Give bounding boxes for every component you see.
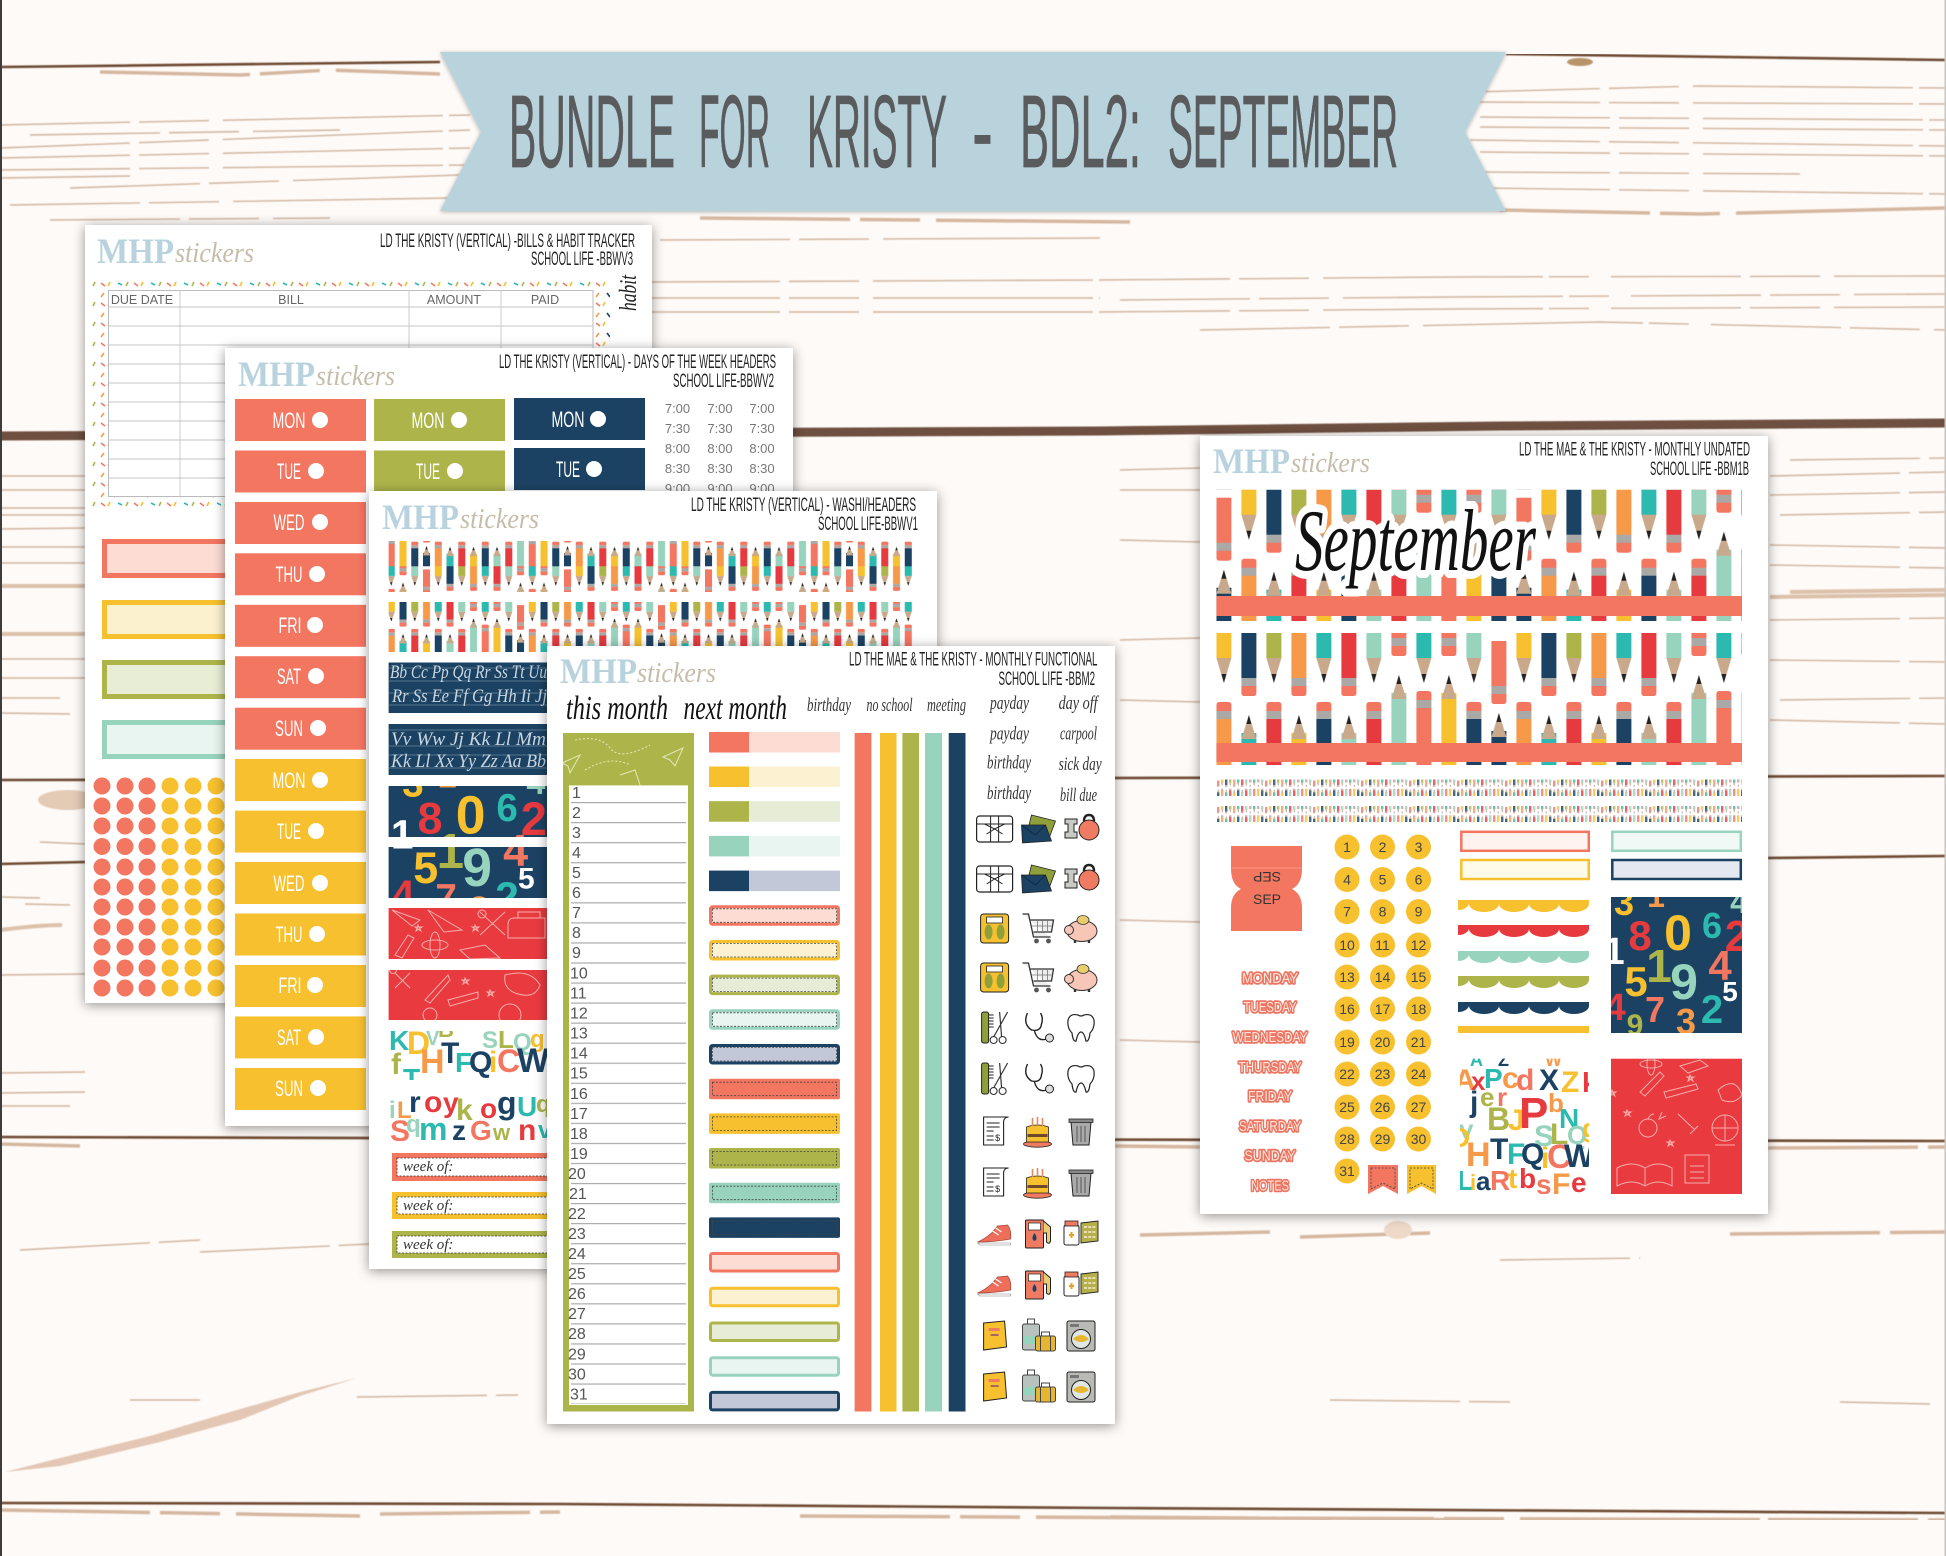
date circles: 12	[1411, 937, 1426, 953]
numbered list panel: 5	[572, 865, 581, 882]
script headings: this month	[566, 690, 668, 727]
date circles: 24	[1411, 1066, 1426, 1082]
alphabet pattern block: g	[1582, 1113, 1598, 1143]
label boxes	[104, 542, 234, 756]
icons: planner, luggage, washer	[984, 1319, 1095, 1402]
date circles: 1	[1343, 839, 1351, 855]
red school doodle block	[1609, 1053, 1742, 1194]
numbered list panel: 4	[572, 845, 581, 862]
outlined bars	[710, 1254, 838, 1410]
day tiles: coral and yellow column: WED	[274, 871, 304, 896]
alphabet pattern block: a	[1476, 1166, 1491, 1196]
day tiles: coral and yellow column: MON	[272, 768, 306, 793]
weekday stickers	[1232, 970, 1308, 1194]
sheet header	[691, 495, 918, 535]
date circles: 9	[1415, 904, 1423, 920]
alphabet pattern strips: g	[530, 1026, 545, 1053]
sheet header: SCHOOL LIFE-BBWV1	[818, 514, 918, 535]
alphabet pattern strips: m	[419, 1111, 447, 1147]
date circles: 17	[1375, 1001, 1390, 1017]
sheet header: LD THE KRISTY (VERTICAL) - DAYS OF THE WEEK HEADERS	[499, 352, 776, 373]
alphabet pattern block: L	[1550, 1118, 1568, 1151]
label boxes	[1461, 832, 1741, 879]
alphabet pattern block: B	[1487, 1101, 1510, 1137]
numbered list panel: 2	[572, 805, 581, 822]
icons: shoe, gas pump, pills	[978, 1220, 1098, 1299]
numbered list panel: 31	[570, 1386, 588, 1404]
scallop washi strips	[1458, 900, 1589, 1033]
alphabet pattern strips: k	[456, 1094, 473, 1127]
alphabet pattern block: J	[1508, 1104, 1525, 1137]
day tiles: coral and yellow column: FRI	[278, 613, 302, 638]
icons: scale, cart, piggy bank	[981, 914, 1097, 992]
alphabet pattern strips: S	[390, 1115, 410, 1148]
sheet header: SCHOOL LIFE -BBWV3	[531, 249, 633, 270]
time labels: 8:00	[707, 441, 733, 456]
date circles: 6	[1415, 872, 1423, 888]
pencil header strip two	[1216, 633, 1742, 765]
sheet header	[1519, 440, 1750, 480]
numbered list panel: 24	[568, 1246, 586, 1263]
numbered list panel: 6	[572, 885, 581, 902]
weekday stickers: THURSDAY	[1238, 1059, 1302, 1076]
week of labels	[394, 1156, 564, 1256]
alphabet pattern strips: U	[517, 1091, 537, 1122]
sheet header: LD THE KRISTY (VERTICAL) -BILLS & HABIT TRACKER	[380, 231, 635, 252]
date circles: 11	[1375, 937, 1390, 953]
banner title text: FOR	[699, 74, 770, 189]
numbered list panel: 9	[572, 945, 581, 962]
alphabet pattern strips: n	[518, 1114, 536, 1147]
date circles: 27	[1411, 1099, 1426, 1115]
alphabet pattern block: s	[1536, 1169, 1552, 1200]
alphabet pattern block: L	[1457, 1165, 1474, 1196]
sheet header: LD THE KRISTY (VERTICAL) - WASHI/HEADERS	[691, 495, 916, 516]
title banner	[440, 52, 1506, 211]
alphabet pattern strips: g	[497, 1085, 517, 1121]
alphabet pattern block: H	[1466, 1136, 1491, 1174]
banner title text	[509, 74, 1398, 189]
cursive alphabet strips: Rr Ss Ee Ff Gg Hh Ii Jj	[391, 686, 547, 707]
alphabet pattern block: d	[1516, 1064, 1534, 1097]
title banner: SEPTEMBER	[1168, 74, 1398, 189]
time labels: 7:30	[749, 421, 775, 436]
date circles: 20	[1375, 1034, 1390, 1050]
day tiles: coral and yellow column: SAT	[277, 664, 301, 689]
numbered list panel: 3	[572, 825, 581, 842]
logo: stickers	[460, 503, 539, 535]
cursive alphabet strips: Vv Ww Jj Kk Ll Mm	[391, 729, 546, 750]
numbered list panel: 17	[570, 1106, 588, 1123]
alphabet pattern strips: o	[424, 1086, 442, 1119]
numbered list panel: 1	[572, 785, 581, 802]
day tiles: olive and navy columns: TUE	[416, 459, 440, 484]
dot stickers	[94, 778, 224, 996]
script headings: carpool	[1060, 724, 1097, 744]
alphabet pattern block: W	[1564, 1138, 1595, 1174]
script headings: bill due	[1060, 785, 1097, 806]
weekday stickers: FRIDAY	[1248, 1088, 1292, 1105]
logo: stickers	[316, 360, 395, 392]
time labels: 8:00	[749, 441, 775, 456]
numbered list panel: 30	[568, 1366, 586, 1384]
alphabet pattern block: R	[1490, 1165, 1510, 1196]
alphabet pattern block: t	[1508, 1163, 1517, 1194]
alphabet pattern block: N	[1559, 1103, 1579, 1134]
numbered list panel: 18	[570, 1126, 588, 1143]
day tiles: coral and yellow column: FRI	[278, 973, 302, 998]
day tiles: coral and yellow column: SUN	[275, 1076, 303, 1101]
numbered list panel: 11	[570, 986, 587, 1002]
numbered list panel: 14	[570, 1046, 588, 1063]
panel: monthly functional sheet	[547, 646, 1115, 1424]
script headings: birthday	[987, 753, 1031, 774]
time labels: 9:00	[665, 481, 690, 496]
date circles: 14	[1375, 969, 1390, 985]
numbered list panel: 13	[570, 1026, 588, 1042]
time labels: 8:30	[707, 461, 733, 476]
alphabet pattern strips: D	[407, 1025, 430, 1061]
panel: monthly undated sheet	[1200, 436, 1768, 1214]
vertical colour stripes	[855, 733, 966, 1412]
banner title text: KRISTY	[807, 74, 947, 189]
logo	[238, 354, 395, 394]
number pattern block	[1611, 897, 1742, 1033]
day tiles: olive and navy columns: MON	[552, 407, 584, 432]
day tiles: coral and yellow column: SAT	[277, 1025, 301, 1050]
date circles	[1334, 834, 1431, 1184]
script headings: payday	[989, 724, 1029, 744]
numbered list panel: 22	[568, 1206, 586, 1223]
day tiles: coral and yellow column: TUE	[277, 819, 301, 844]
label bars column	[709, 732, 840, 1410]
alphabet pattern strips: C	[497, 1043, 520, 1079]
alphabet pattern strips: q	[406, 1111, 421, 1138]
date circles: 30	[1411, 1131, 1426, 1147]
script headings: payday	[989, 693, 1029, 714]
logo: MHP	[238, 354, 315, 394]
weekday stickers: SUNDAY	[1244, 1148, 1296, 1164]
alphabet pattern block: Q	[1567, 1120, 1587, 1150]
alphabet pattern block: Z	[1561, 1066, 1579, 1099]
habit side label: habit	[616, 274, 642, 311]
alphabet pattern block: P	[1484, 1063, 1503, 1094]
numbered list panel: 20	[568, 1166, 586, 1183]
numbered list panel: 25	[568, 1266, 586, 1283]
date circles: 3	[1415, 839, 1423, 855]
alphabet pattern strips: G	[470, 1115, 492, 1146]
week of labels: week of:	[403, 1198, 453, 1214]
day tiles: coral and yellow column	[235, 399, 366, 1110]
alphabet pattern block: i	[1470, 1170, 1476, 1195]
day tiles: coral and yellow column: THU	[276, 922, 302, 947]
day tiles: olive and navy columns: MON	[412, 408, 444, 433]
time labels: 7:30	[707, 421, 733, 436]
day tiles: olive and navy columns: TUE	[556, 457, 580, 482]
time labels: 9:00	[707, 481, 733, 496]
pencil washi strips	[389, 541, 916, 652]
alphabet pattern strips: z	[452, 1115, 466, 1146]
alphabet pattern strips: V	[426, 1028, 440, 1050]
alphabet pattern strips: K	[389, 1025, 409, 1056]
alphabet pattern strips: H	[420, 1043, 445, 1081]
logo: MHP	[1213, 441, 1290, 481]
weekday stickers: TUESDAY	[1244, 999, 1296, 1016]
numbered list panel: 8	[572, 925, 581, 942]
alphabet pattern block: c	[1502, 1062, 1519, 1095]
paper plane doodles	[562, 739, 683, 785]
week of labels: week of:	[403, 1159, 453, 1175]
alphabet pattern block: Q	[1521, 1138, 1544, 1171]
alphabet pattern strips: L	[397, 1097, 412, 1124]
date circles: 21	[1411, 1034, 1426, 1050]
logo: stickers	[175, 237, 254, 269]
alphabet pattern strips: y	[443, 1087, 459, 1118]
date circles: 31	[1339, 1163, 1355, 1179]
weekday stickers: SATURDAY	[1239, 1118, 1301, 1135]
pencil header strip one	[1216, 490, 1742, 621]
bill tracker table: AMOUNT	[427, 293, 481, 307]
bill tracker table: DUE DATE	[111, 293, 173, 307]
day tiles: coral and yellow column: SUN	[275, 716, 303, 741]
date circles: 23	[1375, 1066, 1390, 1082]
alphabet pattern block: j	[1469, 1086, 1478, 1119]
time labels	[665, 401, 775, 496]
date circles: 22	[1339, 1066, 1355, 1082]
panel: monthly undated sheet: SCHOOL LIFE -BBM1B	[1650, 459, 1749, 480]
sheet header	[499, 352, 776, 392]
numbered list panel: 23	[568, 1226, 586, 1243]
alphabet pattern block: e	[1480, 1082, 1494, 1112]
date circles: 13	[1339, 969, 1355, 985]
stitched solid bars	[709, 1079, 840, 1238]
swatch bars	[709, 732, 840, 891]
sheet header: SCHOOL LIFE-BBWV2	[673, 371, 774, 392]
alphabet pattern block: T	[1490, 1133, 1508, 1166]
script headings: sick day	[1059, 754, 1102, 775]
alphabet pattern strips: W	[517, 1042, 550, 1080]
logo: stickers	[637, 657, 716, 689]
numbered list panel: 15	[570, 1066, 588, 1083]
flag stickers	[1368, 1165, 1436, 1194]
week of labels: week of:	[403, 1237, 453, 1253]
alphabet pattern strips: T	[403, 1063, 420, 1094]
alphabet pattern block: r	[1497, 1082, 1507, 1112]
icons: gift, mail, weights	[977, 815, 1099, 893]
time labels: 8:30	[665, 461, 690, 476]
logo: MHP	[382, 497, 459, 537]
alphabet pattern block	[1460, 1058, 1589, 1194]
logo	[560, 651, 716, 691]
script headings: meeting	[927, 695, 966, 716]
alphabet pattern block: k	[1582, 1067, 1598, 1098]
month tab sticker	[1231, 846, 1302, 931]
alphabet pattern strips: T	[441, 1037, 459, 1070]
logo: MHP	[97, 231, 174, 271]
alphabet pattern block: b	[1519, 1163, 1536, 1194]
icons: hair, stethoscope, tooth	[982, 1012, 1094, 1094]
numbered list panel: 28	[568, 1326, 586, 1343]
day tiles: coral and yellow column: MON	[272, 408, 306, 433]
logo	[97, 231, 254, 271]
day tiles: olive and navy columns	[374, 398, 645, 492]
time labels: 9:00	[749, 481, 775, 496]
date circles: 18	[1411, 1001, 1426, 1017]
alphabet pattern block: A	[1470, 1050, 1483, 1070]
red school doodle strips	[388, 908, 550, 1026]
time labels: 7:00	[707, 401, 733, 416]
logo: stickers	[1291, 447, 1370, 479]
numbered list panel: 29	[568, 1346, 586, 1364]
alphabet pattern strips: B	[438, 1017, 454, 1042]
date circles: 2	[1379, 839, 1387, 855]
numbered list panel	[562, 733, 694, 1412]
alphabet pattern strips: F	[455, 1047, 472, 1078]
alphabet pattern block: A	[1454, 1064, 1476, 1097]
alphabet pattern strips: S	[482, 1027, 498, 1054]
alphabet pattern block: P	[1519, 1089, 1548, 1138]
alphabet pattern block: F	[1552, 1168, 1570, 1201]
numbered list panel: 12	[570, 1006, 588, 1022]
sheet header	[849, 650, 1098, 690]
alphabet pattern strips: v	[538, 1117, 552, 1144]
logo	[1213, 441, 1370, 481]
date circles: 15	[1411, 969, 1426, 985]
numbered list panel: 27	[568, 1306, 586, 1323]
alphabet pattern block: b	[1548, 1088, 1564, 1118]
month tab sticker: SEP	[1253, 891, 1281, 907]
date circles: 16	[1339, 1001, 1355, 1017]
bill tracker table: PAID	[531, 293, 559, 307]
cursive alphabet strips: Kk Ll Xx Yy Zz Aa Bb	[390, 751, 546, 772]
time labels: 7:30	[665, 421, 690, 436]
script headings	[566, 690, 1102, 806]
logo	[382, 497, 539, 537]
number pattern strips	[388, 786, 547, 898]
script headings: day off	[1059, 693, 1100, 714]
date circles: 8	[1379, 904, 1387, 920]
date circles: 7	[1343, 904, 1351, 920]
alphabet pattern strips: i	[389, 1097, 396, 1124]
panel: bills and habit tracker sheet	[85, 225, 652, 1003]
mini pencil strips	[1217, 780, 1742, 822]
alphabet pattern strips: Q	[513, 1029, 532, 1056]
alphabet pattern strips: r	[409, 1086, 421, 1119]
banner title text: -	[972, 74, 993, 189]
weekday stickers: NOTES	[1251, 1178, 1289, 1194]
panel: washi and headers sheet	[369, 491, 937, 1269]
date circles: 5	[1379, 872, 1387, 888]
alphabet pattern block: W	[1545, 1050, 1562, 1070]
time labels: 8:30	[749, 461, 775, 476]
date circles: 19	[1339, 1034, 1355, 1050]
alphabet pattern strips: L	[498, 1024, 514, 1054]
script headings: next month	[684, 690, 787, 727]
numbered list panel: 19	[570, 1146, 588, 1163]
banner title text: BDL2:	[1020, 74, 1141, 189]
script headings: birthday	[807, 695, 851, 716]
alphabet pattern block: D	[1450, 1122, 1470, 1153]
banner title text: BUNDLE	[509, 74, 675, 189]
numbered list panel: 10	[570, 966, 588, 982]
bill tracker table	[108, 290, 593, 497]
weekday stickers: WEDNESDAY	[1232, 1029, 1308, 1046]
alphabet pattern block: i	[1541, 1142, 1549, 1175]
numbered list panel: 16	[570, 1086, 588, 1103]
alphabet pattern strips: Q	[469, 1046, 492, 1079]
time labels: 7:00	[665, 401, 690, 416]
alphabet pattern block: Z	[1498, 1050, 1509, 1070]
alphabet pattern strips: o	[480, 1093, 497, 1124]
stitched light bars	[710, 907, 838, 1063]
sheet header	[380, 231, 635, 270]
bill tracker table: BILL	[278, 293, 304, 307]
icons: bill, cake, trash	[984, 1117, 1093, 1198]
sheet header: LD THE MAE & THE KRISTY - MONTHLY FUNCTIONAL	[849, 650, 1098, 670]
alphabet pattern block: v	[1459, 1114, 1474, 1144]
alphabet pattern strips: w	[492, 1120, 511, 1145]
time labels: 7:00	[749, 401, 775, 416]
sprinkle frame	[92, 278, 610, 512]
cursive alphabet strips: Bb Cc Pp Qq Rr Ss Tt Uu	[390, 662, 547, 683]
date circles: 26	[1375, 1099, 1390, 1115]
alphabet pattern block: C	[1547, 1138, 1572, 1176]
logo: MHP	[560, 651, 637, 691]
icon sticker grid	[977, 815, 1099, 1402]
day tiles: coral and yellow column: WED	[274, 510, 304, 535]
alphabet pattern block: S	[1534, 1120, 1554, 1153]
alphabet pattern block: e	[1571, 1167, 1587, 1198]
alphabet pattern block: X	[1539, 1064, 1559, 1097]
alphabet pattern block: x	[1471, 1066, 1486, 1096]
numbered list panel: 26	[568, 1286, 586, 1303]
panel: days of the week headers sheet	[225, 348, 793, 1126]
date circles: 25	[1339, 1099, 1355, 1115]
weekday stickers: MONDAY	[1242, 970, 1298, 987]
numbered list panel: 21	[569, 1186, 587, 1203]
alphabet pattern strips: f	[391, 1048, 402, 1081]
date circles: 29	[1375, 1131, 1390, 1147]
alphabet pattern strips: i	[489, 1046, 497, 1079]
day tiles: coral and yellow column: TUE	[277, 459, 301, 484]
September title: September	[1295, 493, 1536, 590]
day tiles: coral and yellow column: THU	[276, 562, 302, 587]
script headings: birthday	[987, 783, 1031, 804]
numbered list panel: 7	[572, 905, 581, 922]
sheet header: SCHOOL LIFE -BBM2	[998, 669, 1095, 690]
alphabet pattern block: F	[1507, 1138, 1525, 1171]
date circles: 10	[1339, 937, 1355, 953]
month tab sticker: SEP	[1253, 869, 1281, 885]
alphabet pattern strips: q	[536, 1091, 551, 1118]
time labels: 8:00	[665, 441, 690, 456]
date circles: 28	[1339, 1131, 1355, 1147]
cursive alphabet strips	[389, 662, 549, 775]
script headings: no school	[866, 695, 912, 716]
date circles: 4	[1343, 872, 1351, 888]
alphabet pattern strips	[390, 1031, 547, 1141]
